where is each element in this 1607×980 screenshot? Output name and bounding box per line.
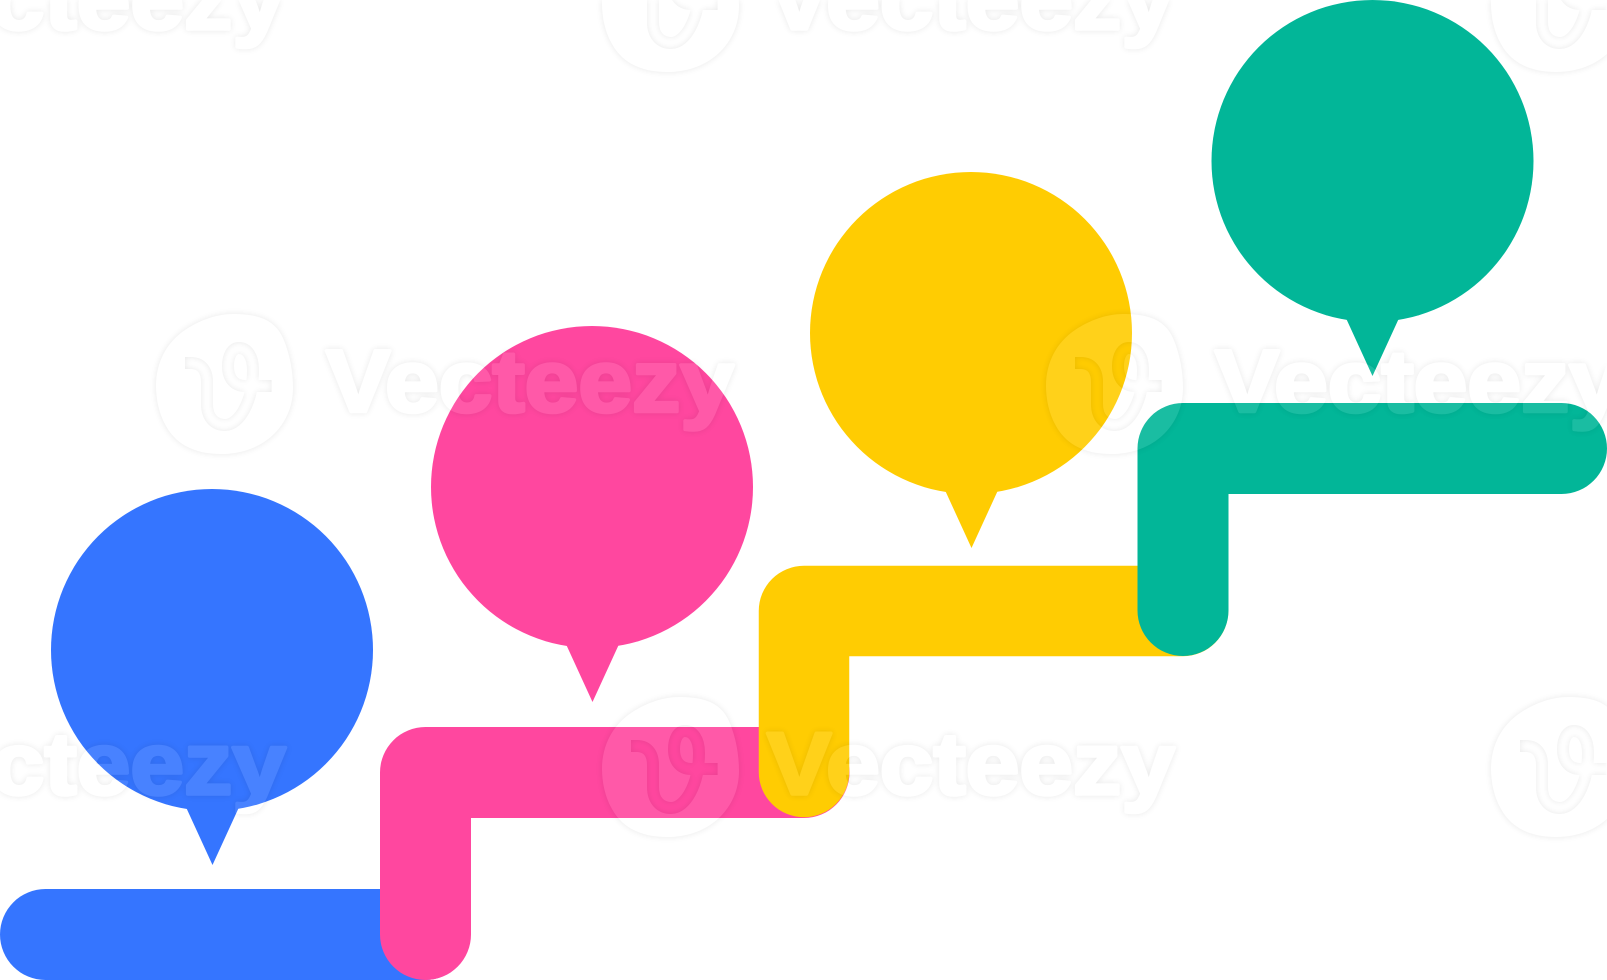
watermark: top row	[0, 0, 1607, 72]
watermark: middle row: Vecteezy	[1215, 332, 1607, 430]
watermark: middle row: Vecteezy	[326, 332, 734, 430]
step 4: green stair bar	[1183, 448, 1562, 610]
step 3: yellow stair bar	[804, 611, 1183, 772]
blue speech bubble	[51, 489, 373, 865]
watermark: bottom row	[0, 697, 1607, 837]
step 2: pink stair bar	[426, 772, 804, 934]
watermark: bottom row: Vecteezy	[767, 714, 1175, 813]
yellow speech bubble	[810, 172, 1132, 548]
pink speech bubble	[431, 326, 753, 702]
watermark: middle row	[156, 314, 1607, 454]
step 1: blue bar	[46, 889, 425, 980]
green speech bubble	[1212, 0, 1534, 376]
